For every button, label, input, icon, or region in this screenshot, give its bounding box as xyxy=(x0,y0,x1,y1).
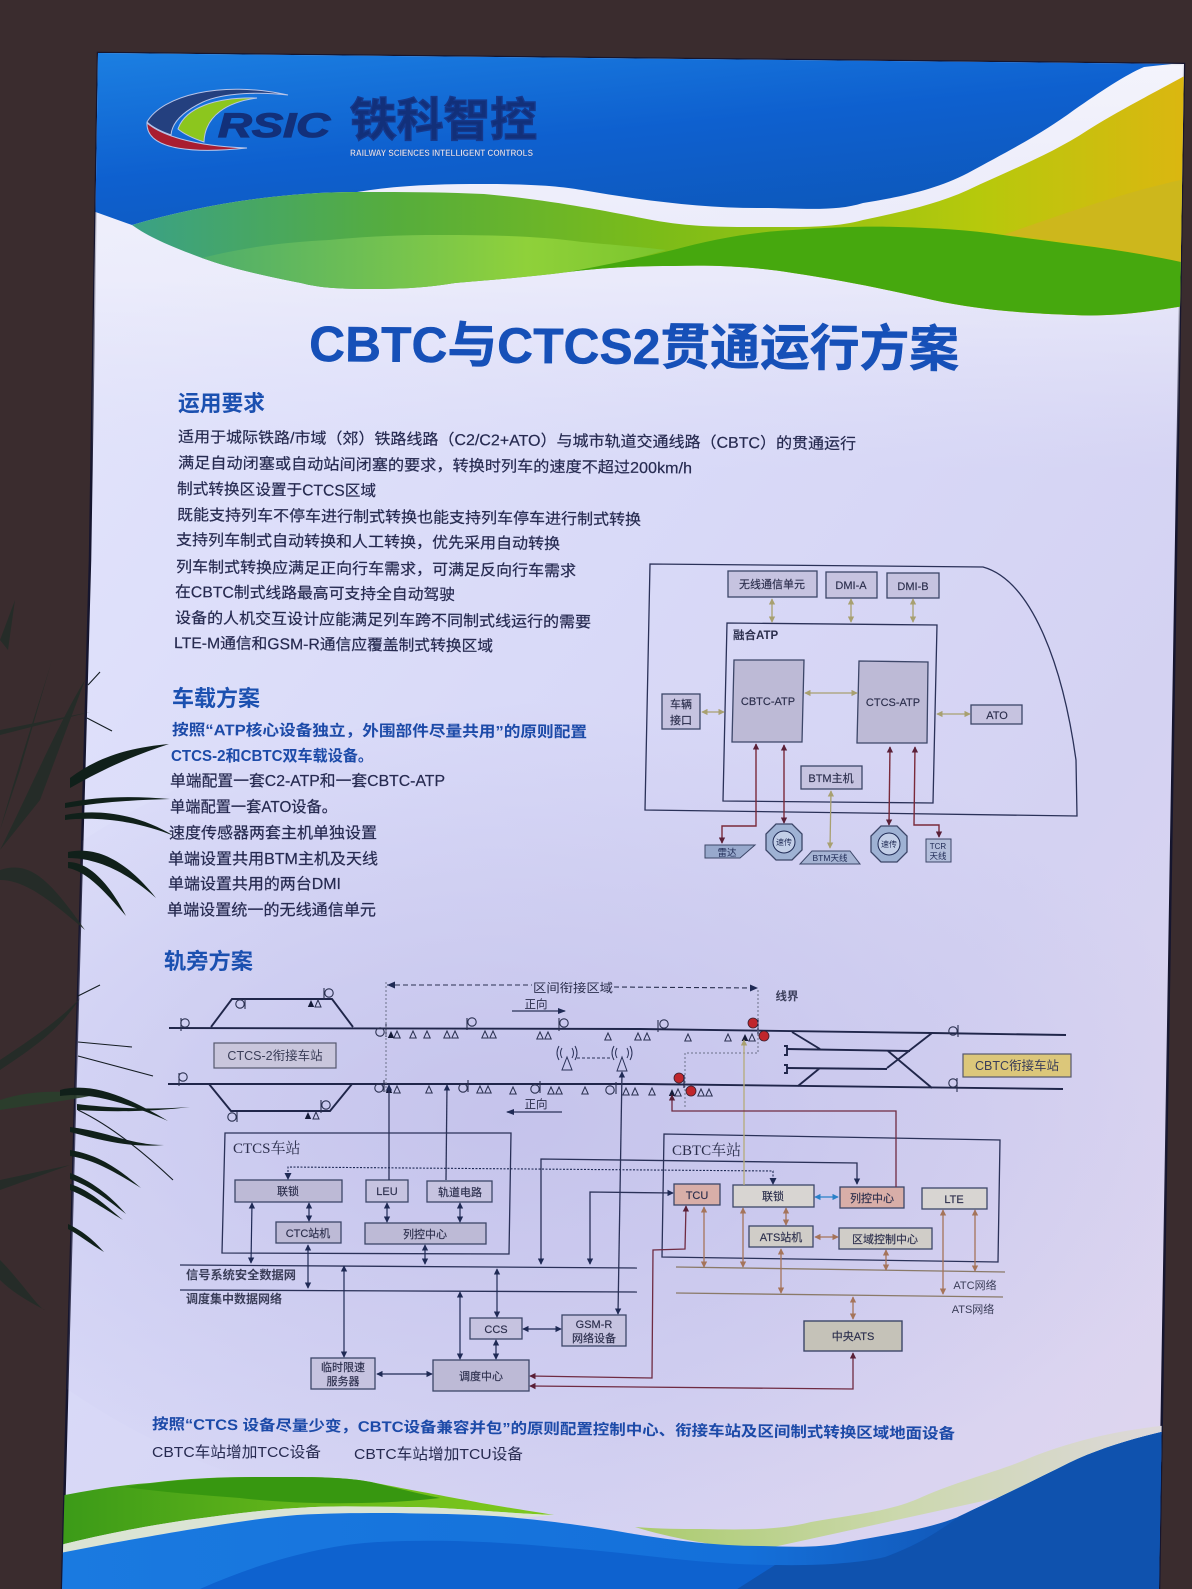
signal network lines xyxy=(180,1265,637,1306)
box: temporary speed restriction server: 服务器 xyxy=(326,1375,360,1388)
sensor connection arrows xyxy=(722,744,939,843)
thin leaf tips xyxy=(78,672,173,1180)
requirements list xyxy=(174,428,856,655)
principle statement: 按照“CTCS 设备尽量少变，CBTC设备兼容并包”的原则配置控制中心、衔接车站及区间制式转换区域地面设备 xyxy=(152,1415,955,1443)
onboard architecture diagram xyxy=(645,564,1077,864)
dotted interlock link xyxy=(284,1167,776,1185)
fused ATP frame: 融合ATP xyxy=(733,628,778,642)
requirements list: LTE-M通信和GSM-R通信应覆盖制式转换区域 xyxy=(174,633,493,655)
box: CCS xyxy=(470,1318,522,1339)
box: CCS: CCS xyxy=(484,1324,508,1336)
box: zone controller xyxy=(839,1228,932,1249)
speed sensor 1: 速传 xyxy=(776,837,792,847)
direction upper: 正向 xyxy=(524,997,548,1011)
onboard list: 单端设置统一的无线通信单元 xyxy=(167,901,376,919)
footer waves xyxy=(50,1425,1170,1589)
BTM antenna xyxy=(800,851,860,864)
section: requirements xyxy=(174,391,856,655)
speed sensor 2: 速传 xyxy=(881,839,897,849)
transition signals red xyxy=(674,1018,769,1096)
dispatch equipment xyxy=(311,1072,857,1391)
onboard list: 速度传感器两套主机单独设置 xyxy=(169,824,377,842)
onboard list xyxy=(167,720,587,919)
dispatch centralized data network: 调度集中数据网络 xyxy=(186,1291,282,1306)
box: GSM-R network equipment: 网络设备 xyxy=(572,1331,616,1345)
interface zone dimension: 区间衔接区域 xyxy=(533,980,613,995)
plant fronds xyxy=(0,600,190,1310)
company name english: RAILWAY SCIENCES INTELLIGENT CONTROLS xyxy=(350,148,533,159)
box: CBTC-ATP xyxy=(732,660,804,742)
box: GSM-R network equipment xyxy=(562,1315,626,1346)
direction lower xyxy=(506,1097,562,1115)
requirements list: 制式转换区设置于CTCS区域 xyxy=(177,480,376,500)
footer notes xyxy=(152,1415,955,1463)
box: ATO: ATO xyxy=(986,710,1008,722)
box: dispatch center: 调度中心 xyxy=(459,1369,503,1383)
box: interlocking xyxy=(733,1185,814,1207)
signals xyxy=(179,988,958,1122)
ATC network: ATC网络 xyxy=(953,1278,997,1292)
CBTC station frame xyxy=(662,1134,1000,1262)
logo: RSIC swoosh and company name xyxy=(147,89,537,159)
box: LEU: LEU xyxy=(376,1186,398,1198)
logo wordmark RSIC: RSIC xyxy=(218,107,331,145)
boundary label: 线界 xyxy=(776,989,799,1003)
direction lower: 正向 xyxy=(524,1097,548,1111)
dotted boundaries xyxy=(386,982,758,1107)
box: vehicle interface: 接口 xyxy=(670,714,692,727)
note: TCU: CBTC车站增加TCU设备 xyxy=(354,1446,523,1463)
main tracks and station loops xyxy=(168,999,1066,1111)
CBTC junction station label xyxy=(963,1054,1071,1077)
tan connection arrows xyxy=(702,599,970,848)
TCR antenna: 天线 xyxy=(929,851,947,861)
CTCS station frame xyxy=(222,1133,511,1254)
box: CTCS-ATP: CTCS-ATP xyxy=(866,697,920,709)
box: dispatch center xyxy=(433,1360,529,1391)
box: vehicle interface xyxy=(662,694,700,729)
box: interlocking xyxy=(235,1180,342,1202)
box: LEU xyxy=(366,1180,408,1202)
requirements list: 支持列车制式自动转换和人工转换，优先采用自动转换 xyxy=(176,531,561,553)
onboard list: 单端配置一套C2-ATP和一套CBTC-ATP xyxy=(170,772,445,790)
CTCS-2 junction station label xyxy=(214,1043,336,1068)
dispatch arrows xyxy=(344,1072,857,1374)
company name chinese: 铁科智控 xyxy=(350,94,537,146)
interface zone dimension xyxy=(387,980,758,995)
note: TCC: CBTC车站增加TCC设备 xyxy=(152,1444,321,1461)
section: onboard scheme xyxy=(167,686,587,919)
box: DMI-B xyxy=(887,573,939,598)
requirements list: 列车制式转换应满足正向行车需求，可满足反向行车需求 xyxy=(176,557,576,580)
box: DMI-A: DMI-A xyxy=(835,580,867,592)
heading: onboard scheme: 车载方案 xyxy=(172,686,260,711)
box: BTM host xyxy=(801,766,862,789)
title: CBTC与CTCS2贯通运行方案 xyxy=(309,316,959,378)
box: CTC station machine xyxy=(276,1222,341,1243)
box: ATS station machine: ATS站机 xyxy=(760,1230,802,1244)
requirements list: 既能支持列车不停车进行制式转换也能支持列车停车进行制式转换 xyxy=(177,506,642,529)
onboard list: 单端设置共用的两台DMI xyxy=(168,875,341,893)
box: central ATS xyxy=(804,1321,902,1351)
TCR antenna xyxy=(926,839,951,862)
logo swoosh xyxy=(147,89,288,150)
signal safety data network: 信号系统安全数据网 xyxy=(186,1267,296,1282)
box: GSM-R network equipment: GSM-R xyxy=(576,1319,612,1331)
track circuit markers outlined xyxy=(313,1000,755,1119)
box: temporary speed restriction server xyxy=(311,1358,375,1389)
signal safety data network xyxy=(180,1265,637,1282)
box: temporary speed restriction server: 临时限速 xyxy=(321,1360,365,1374)
box: LTE xyxy=(922,1188,987,1209)
transponder markers filled xyxy=(305,1000,748,1119)
speed sensor 1 xyxy=(766,824,802,860)
CBTC station xyxy=(530,1040,1005,1389)
box: wireless unit xyxy=(728,571,817,597)
radio antennas xyxy=(557,1046,632,1071)
heading: requirements: 运用要求 xyxy=(178,391,265,416)
box: wireless unit: 无线通信单元 xyxy=(739,577,805,591)
requirements list: 适用于城际铁路/市域（郊）铁路线路（C2/C2+ATO）与城市轨道交通线路（CBTC）的贯通运行 xyxy=(178,428,856,453)
CBTC junction station label: CBTC衔接车站 xyxy=(975,1058,1059,1073)
box: CTCS-ATP xyxy=(857,661,928,743)
box: TCU: TCU xyxy=(686,1190,708,1202)
box: ATS station machine xyxy=(749,1226,813,1247)
requirements list: 在CBTC制式线路最高可支持全自动驾驶 xyxy=(175,583,455,604)
CBTC arrows xyxy=(530,1040,975,1389)
CTCS station frame: CTCS车站 xyxy=(233,1140,301,1157)
onboard list: 按照“ATP核心设备独立，外围部件尽量共用”的原则配置 xyxy=(172,720,587,741)
station internal arrows xyxy=(251,1085,460,1288)
box: track circuit: 轨道电路 xyxy=(438,1185,482,1199)
requirements list: 设备的人机交互设计应能满足列车跨不同制式线运行的需要 xyxy=(175,608,591,631)
section: trackside scheme xyxy=(164,949,1071,1391)
heading: trackside scheme: 轨旁方案 xyxy=(164,949,253,974)
requirements list: 满足自动闭塞或自动站间闭塞的要求，转换时列车的速度不超过200km/h xyxy=(178,454,692,477)
onboard list: CTCS-2和CBTC双车载设备。 xyxy=(171,746,373,765)
ATS network: ATS网络 xyxy=(952,1302,994,1316)
box: DMI-A xyxy=(826,572,877,598)
ATC network xyxy=(676,1267,1005,1292)
onboard list: 单端配置一套ATO设备。 xyxy=(170,798,337,816)
box: zone controller: 区域控制中心 xyxy=(852,1232,918,1246)
box: LTE: LTE xyxy=(944,1194,964,1206)
fronds on dark wall xyxy=(0,600,95,1310)
box: train control center xyxy=(840,1187,904,1208)
box: central ATS: 中央ATS xyxy=(832,1330,874,1343)
speed sensor 2 xyxy=(871,826,907,862)
box: TCU xyxy=(674,1184,720,1205)
box: BTM host: BTM主机 xyxy=(808,771,854,785)
radar xyxy=(705,845,755,859)
onboard list: 单端设置共用BTM主机及天线 xyxy=(168,850,378,868)
box: train control center: 列控中心 xyxy=(403,1227,447,1241)
fused ATP frame xyxy=(723,623,937,803)
box: interlocking: 联锁 xyxy=(277,1184,299,1198)
track layout xyxy=(168,980,1071,1122)
train outline xyxy=(645,564,1077,816)
direction upper xyxy=(512,997,566,1014)
box: vehicle interface: 车辆 xyxy=(670,697,692,711)
box: CTC station machine: CTC站机 xyxy=(286,1226,330,1240)
box: interlocking: 联锁 xyxy=(762,1189,784,1203)
CTCS station xyxy=(222,1085,511,1288)
box: ATO xyxy=(971,705,1022,724)
CBTC station frame: CBTC车站 xyxy=(672,1142,741,1159)
BTM antenna: BTM天线 xyxy=(813,853,848,863)
ATS network xyxy=(676,1293,1003,1316)
box: train control center: 列控中心 xyxy=(850,1191,894,1205)
radar: 雷达 xyxy=(717,847,737,859)
CTCS-2 junction station label: CTCS-2衔接车站 xyxy=(227,1048,323,1063)
TCR antenna: TCR xyxy=(930,842,946,851)
leaves over poster xyxy=(60,744,190,1252)
box: DMI-B: DMI-B xyxy=(897,581,929,593)
box: CBTC-ATP: CBTC-ATP xyxy=(741,696,795,708)
box: train control center xyxy=(365,1223,486,1244)
box: track circuit xyxy=(427,1181,492,1202)
